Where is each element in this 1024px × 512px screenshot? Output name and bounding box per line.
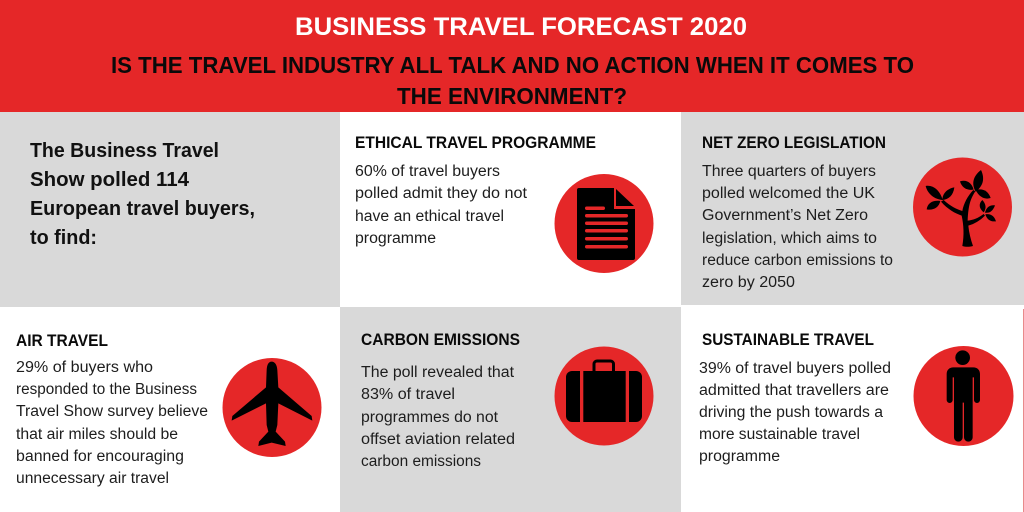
heading: sustainable travel: SUSTAINABLE TRAVEL: [702, 331, 874, 349]
text: net zero statistic: legislation, which aims to: [702, 230, 877, 247]
text: ethical travel statistic: [355, 163, 528, 247]
icon: person: [914, 346, 1014, 446]
text: sustainable travel statistic: programme: [699, 448, 780, 465]
icon: tree: [913, 158, 1012, 256]
panel: net zero legislation: [681, 112, 1024, 305]
panel: ethical travel programme: [340, 112, 681, 307]
text: net zero statistic: Government’s Net Zero: [702, 207, 868, 224]
text: net zero statistic: [702, 163, 893, 291]
subtitle: [111, 52, 914, 109]
text: sustainable travel statistic: driving the push towards a: [699, 404, 883, 421]
text: air travel statistic: [16, 359, 208, 487]
text: net zero statistic: zero by 2050: [702, 274, 795, 291]
text: carbon emissions statistic: [361, 364, 515, 470]
panel: intro: to find:: [30, 226, 97, 249]
panel: intro: The Business Travel: [30, 139, 219, 162]
panel: intro: Show polled 114: [30, 168, 190, 191]
icon: suitcase: [554, 346, 654, 446]
panel: intro: [0, 112, 340, 307]
text: sustainable travel statistic: [699, 360, 891, 465]
heading: carbon emissions: CARBON EMISSIONS: [361, 331, 520, 349]
panel: sustainable travel: [681, 305, 1024, 512]
text: carbon emissions statistic: 83% of travel: [361, 386, 455, 403]
text: carbon emissions statistic: programmes do not: [361, 409, 499, 426]
text: air travel statistic: that air miles should be: [16, 426, 178, 443]
panel: intro: European travel buyers,: [30, 197, 255, 220]
text: air travel statistic: unnecessary air travel: [16, 470, 169, 487]
text: ethical travel statistic: have an ethical travel: [355, 208, 504, 225]
heading: ethical travel programme: ETHICAL TRAVEL PROGRAMME: [355, 134, 596, 152]
text: air travel statistic: responded to the Business: [16, 381, 197, 398]
heading: net zero legislation: NET ZERO LEGISLATION: [702, 134, 886, 152]
text: ethical travel statistic: programme: [355, 230, 436, 247]
icon: document: [554, 174, 654, 273]
text: net zero statistic: reduce carbon emissions to: [702, 252, 893, 269]
text: net zero statistic: polled welcomed the UK: [702, 185, 876, 202]
text: carbon emissions statistic: The poll revealed that: [361, 364, 515, 381]
icon: airplane: [222, 358, 322, 457]
heading: air travel: AIR TRAVEL: [16, 332, 108, 350]
text: net zero statistic: Three quarters of buyers: [702, 163, 876, 180]
subtitle: IS THE TRAVEL INDUSTRY ALL TALK AND NO ACTION WHEN IT COMES TO: [111, 52, 914, 78]
title: BUSINESS TRAVEL FORECAST 2020: [295, 13, 747, 41]
text: air travel statistic: Travel Show survey believe: [16, 403, 208, 420]
header banner: [0, 0, 1024, 112]
panel: carbon emissions: [340, 307, 681, 512]
text: air travel statistic: banned for encouraging: [16, 448, 184, 465]
panel: air travel: [0, 307, 340, 512]
text: sustainable travel statistic: 39% of travel buyers polled: [699, 360, 891, 377]
text: ethical travel statistic: 60% of travel buyers: [355, 163, 500, 180]
text: carbon emissions statistic: carbon emissions: [361, 453, 481, 470]
text: sustainable travel statistic: admitted that travellers are: [699, 382, 889, 399]
text: ethical travel statistic: polled admit they do not: [355, 185, 528, 202]
text: sustainable travel statistic: more sustainable travel: [699, 426, 860, 443]
subtitle: THE ENVIRONMENT?: [397, 83, 627, 109]
text: air travel statistic: 29% of buyers who: [16, 359, 153, 376]
text: carbon emissions statistic: offset aviation related: [361, 431, 515, 448]
